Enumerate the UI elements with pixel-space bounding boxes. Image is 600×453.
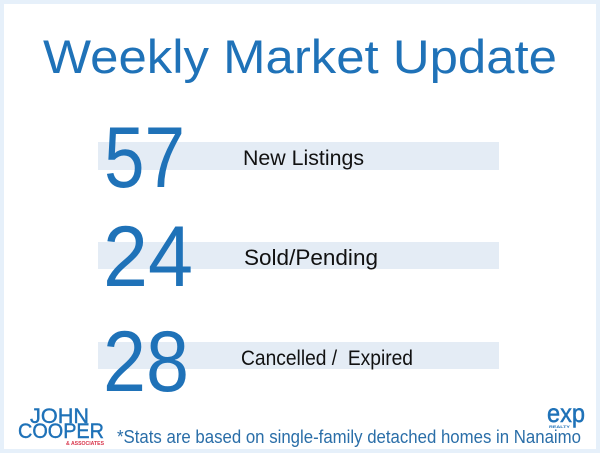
logo: John Cooper & Associates: COOPER xyxy=(18,420,104,443)
label: new listings: New Listings xyxy=(243,146,364,170)
stat row: cancelled / expired xyxy=(98,314,499,410)
stat row: new listings xyxy=(98,110,499,206)
stat row: sold/pending xyxy=(98,209,499,305)
logo: John Cooper & Associates xyxy=(18,405,105,447)
label band xyxy=(98,242,499,269)
number: 28: 28 xyxy=(103,314,189,410)
logo: John Cooper & Associates: & ASSOCIATES xyxy=(66,441,105,447)
label band xyxy=(98,142,499,170)
logo: eXp Realty: exp xyxy=(547,398,585,428)
label: cancelled / expired: Cancelled / Expired xyxy=(241,347,413,370)
label band xyxy=(98,342,499,369)
title: Weekly Market Update xyxy=(43,30,557,83)
number: 57: 57 xyxy=(104,110,185,206)
number: 24: 24 xyxy=(103,209,193,305)
logo: eXp Realty: REALTY xyxy=(549,424,570,429)
footnote: *Stats are based on single-family detached homes in Nanaimo xyxy=(117,427,581,447)
logo: John Cooper & Associates: JOHN xyxy=(30,405,89,428)
label: sold/pending: Sold/Pending xyxy=(244,245,378,270)
